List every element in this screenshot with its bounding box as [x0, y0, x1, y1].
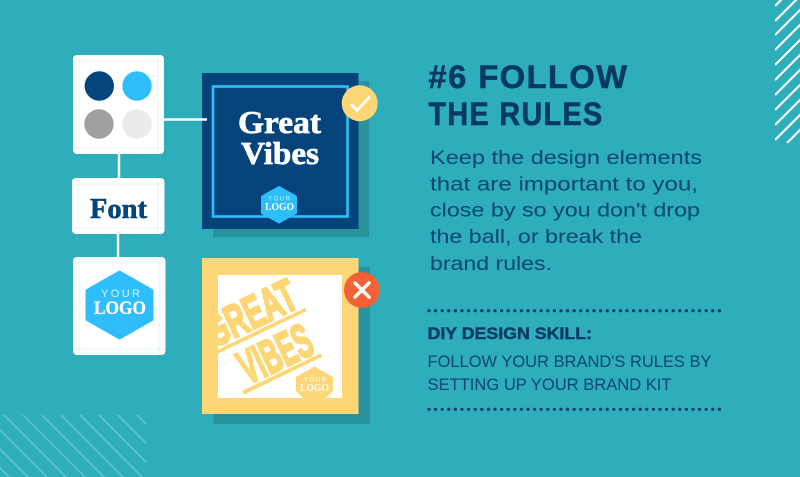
panel: logo card: YOUR — [101, 288, 140, 300]
panel: incorrect design example — [196, 258, 370, 424]
icon: small logo hexagon: YOUR — [268, 196, 291, 202]
body text: the ball, or break the — [430, 226, 642, 248]
body text: brand rules. — [430, 253, 552, 275]
body text: close by so you don't drop — [430, 200, 700, 222]
headline: Great Vibes: Vibes — [241, 135, 319, 171]
distorted headline: Great Vibes: VIBES — [230, 314, 321, 395]
icon: check badge — [342, 85, 378, 121]
dotted divider top — [429, 309, 720, 312]
decorative stripes bottom left — [0, 415, 146, 477]
headline: Great Vibes — [238, 104, 321, 171]
title: #6 FOLLOW — [428, 59, 628, 95]
skill text: SETTING UP YOUR BRAND KIT — [428, 375, 672, 394]
body text: Keep the design elements — [430, 147, 702, 169]
panel: font card: Font — [90, 194, 148, 225]
panel: correct design example — [202, 73, 369, 237]
body text: that are important to you, — [430, 174, 698, 196]
skill text: FOLLOW YOUR BRAND'S RULES BY — [428, 352, 712, 371]
distorted headline: Great Vibes: GREAT — [196, 269, 305, 357]
title — [428, 59, 628, 132]
skill text — [428, 352, 712, 394]
skill heading: DIY DESIGN SKILL: — [428, 324, 592, 343]
panel: colour palette card — [73, 55, 164, 154]
connector lines — [118, 120, 207, 259]
panel: logo card — [73, 257, 166, 355]
icon: distorted logo: LOGO — [300, 383, 329, 394]
icon: cross badge — [344, 272, 380, 308]
decorative stripes top right — [775, 0, 800, 143]
icon: distorted logo: YOUR — [304, 378, 327, 384]
icon: small logo hexagon: LOGO — [265, 202, 294, 213]
panel: font card — [72, 178, 164, 234]
icon: distorted logo — [296, 366, 333, 398]
body text — [430, 147, 702, 275]
dotted divider bottom — [429, 408, 720, 411]
panel: logo card: LOGO — [94, 298, 146, 319]
distorted headline: Great Vibes — [218, 276, 322, 395]
icon: small logo hexagon — [262, 187, 296, 222]
headline: Great Vibes: Great — [238, 104, 321, 140]
title: THE RULES — [428, 96, 604, 132]
